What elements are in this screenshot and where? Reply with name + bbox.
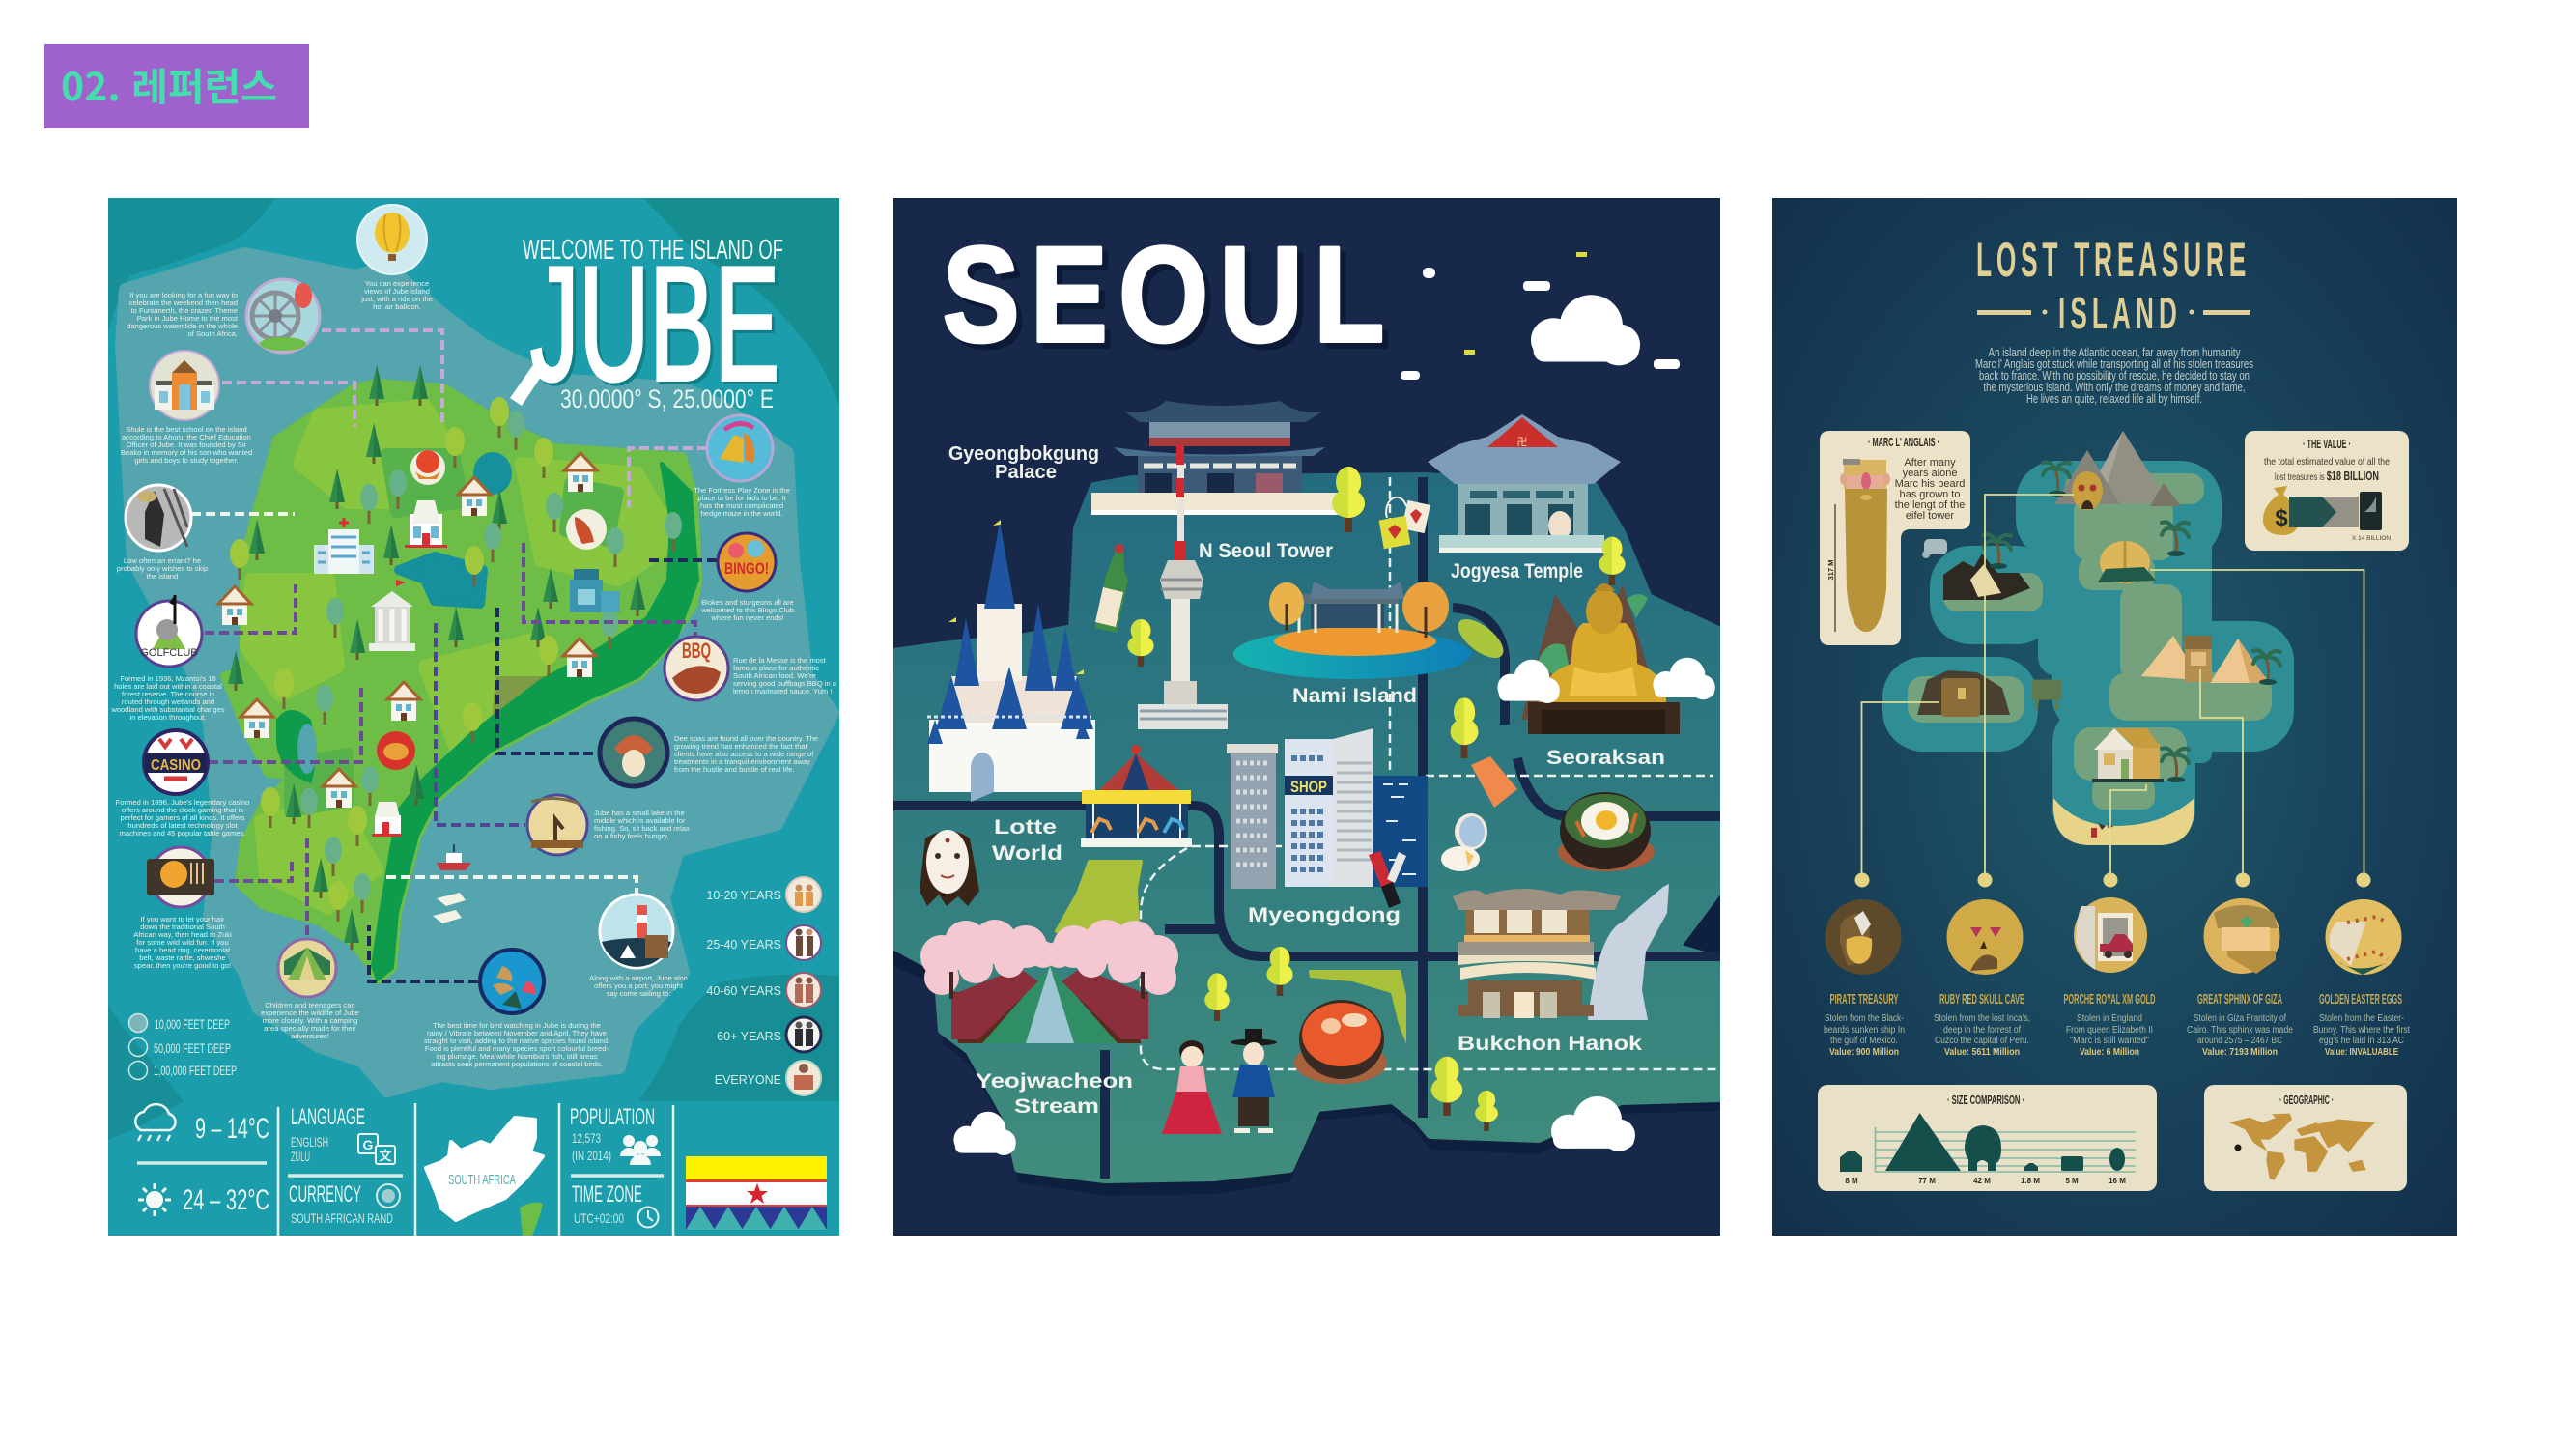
text blurbs: routed through wetlands and xyxy=(122,697,214,706)
food badges xyxy=(377,450,607,770)
currency: CURRENCY xyxy=(289,1181,361,1208)
trees xyxy=(1127,467,1626,1131)
roads xyxy=(893,477,1720,1179)
caption: porche royal: Stolen in England xyxy=(2077,1013,2142,1024)
text blurbs: forest reserve. The course is xyxy=(122,690,214,698)
text blurbs: Formed in 1936, Mzantsi's 18 xyxy=(120,674,216,683)
text blurbs: on a fishy feels hungry. xyxy=(594,832,669,840)
icon: bbq: BBQ xyxy=(682,639,711,663)
card: The Value: · THE VALUE · xyxy=(2303,437,2351,451)
caption: pirate treasury: the gulf of Mexico. xyxy=(1830,1036,1898,1046)
text blurbs: If you want to let your hair xyxy=(141,915,225,923)
sky marks xyxy=(1401,252,1680,380)
place labels: Gyeongbokgung xyxy=(948,443,1099,465)
medallion: pirate treasury xyxy=(1826,899,1901,975)
text blurbs: If you are looking for a fun way to xyxy=(129,291,238,299)
place labels: Myeongdong xyxy=(1248,904,1401,926)
text blurbs: dangerous waterslide in the whole xyxy=(127,322,238,330)
caption: pirate treasury xyxy=(1824,991,1905,1058)
icon: casino xyxy=(144,730,208,794)
intro text: An island deep in the Atlantic ocean, far away from humanity xyxy=(1988,346,2241,359)
text blurbs: offers you a port; you might xyxy=(594,981,684,990)
text blurbs: to Funtanerth, the crazed Theme xyxy=(131,306,238,315)
caption: porche royal: From queen Elizabeth II xyxy=(2066,1025,2153,1036)
text blurbs: belt, waste rattle, shweshe xyxy=(139,953,226,962)
text blurbs: Food is plentiful and many species sport colourful breed- xyxy=(425,1044,609,1053)
currency: SOUTH AFRICAN RAND xyxy=(291,1210,393,1226)
population: POPULATION xyxy=(570,1104,655,1130)
legend: depth: 50,000 FEET DEEP xyxy=(154,1040,231,1056)
scale line xyxy=(1826,504,1835,632)
panel: Lost Treasure Island infographic xyxy=(1772,198,2457,1236)
text blurbs: where fun never ends! xyxy=(710,613,784,622)
text blurbs: have a head ring, ceremonial xyxy=(135,946,230,954)
legend: age groups xyxy=(706,877,821,1095)
card: Marc L'Anglais: years alone xyxy=(1903,468,1957,479)
beach xyxy=(493,676,545,715)
caption: ruby red skull cave xyxy=(1934,991,2030,1058)
icon: airport photo xyxy=(126,485,191,551)
card: size comparison chart: 77 M xyxy=(1918,1177,1936,1185)
legend: depth: 10,000 FEET DEEP xyxy=(155,1016,230,1032)
card: geographic map xyxy=(2204,1085,2407,1191)
text blurbs: for some wild wild fun. If you xyxy=(136,938,229,947)
icon: Gyeongbokgung palace xyxy=(1091,401,1339,515)
place labels: Palace xyxy=(995,462,1057,483)
population xyxy=(570,1104,661,1165)
treasure captions xyxy=(1824,991,2410,1058)
title: JUBE xyxy=(530,233,779,414)
title: SEOUL xyxy=(943,218,1396,370)
card: size comparison chart: 5 M xyxy=(2065,1177,2079,1185)
land xyxy=(893,477,1720,1179)
currency xyxy=(289,1181,400,1226)
heading badge: 02. 레퍼런스: 02. 레퍼런스 xyxy=(61,56,277,112)
text blurbs: African way, then head to Zuki xyxy=(133,930,232,939)
caption: pirate treasury: Stolen from the Black- xyxy=(1825,1013,1904,1024)
text blurbs: welcomed to this Bingo Club xyxy=(700,606,794,614)
beach xyxy=(2053,798,2194,845)
legend: depth xyxy=(129,1014,237,1080)
language: G xyxy=(363,1137,374,1152)
bottom facts bar xyxy=(135,1103,827,1236)
text blurbs: middle which is available for xyxy=(594,816,686,825)
card: Marc L'Anglais: Marc his beard xyxy=(1895,478,1965,490)
card: size comparison chart: 1.8 M xyxy=(2021,1177,2040,1185)
text blurbs: Beako in memory of his son who wanted xyxy=(121,448,252,457)
intro text xyxy=(1975,346,2253,406)
legend: age groups: EVERYONE xyxy=(715,1073,781,1087)
card: size comparison chart: 42 M xyxy=(1973,1177,1991,1185)
card: Marc L'Anglais: After many xyxy=(1904,457,1956,469)
icon: hot air balloon xyxy=(357,205,427,274)
scale line: 317 M xyxy=(1826,560,1835,580)
caption: golden easter eggs: Stolen from the Easter- xyxy=(2319,1013,2404,1024)
icon: money bag xyxy=(2263,486,2298,535)
text blurbs: Jube has a small lake in the xyxy=(594,809,685,817)
icon: Nami Island xyxy=(1233,582,1471,679)
language: 文 xyxy=(379,1149,392,1163)
text blurbs: serving good buffbags BBQ in a xyxy=(733,679,837,688)
icon: golf club xyxy=(136,595,202,667)
island map xyxy=(1882,431,2294,845)
icon: play zone xyxy=(707,415,773,481)
text blurbs: Along with a airport, Jube also xyxy=(589,974,688,982)
text blurbs: girls and boys to study together. xyxy=(134,456,239,465)
icon: Myeongdong buildings xyxy=(1227,728,1428,908)
text blurbs: ing plumage. Meanwhile Namibia's fish, still areas xyxy=(436,1052,598,1061)
caption: great sphinx: GREAT SPHINX OF GIZA xyxy=(2197,991,2282,1008)
text blurbs: adventures! xyxy=(291,1032,329,1040)
text blurbs: in elevation throughout. xyxy=(130,713,206,722)
icon: cosmetics xyxy=(1441,813,1487,871)
time zone: TIME ZONE xyxy=(572,1181,642,1208)
icon: N Seoul Tower xyxy=(1138,445,1228,729)
card: The Value: lost treasures is $18 BILLION xyxy=(2275,469,2379,483)
connector lines xyxy=(1862,495,2364,874)
intro text: the mysterious island. With only the dreams of money and fame, xyxy=(1984,381,2245,394)
language xyxy=(291,1104,395,1164)
card: Marc L'Anglais xyxy=(1820,431,1970,645)
icon: carousel xyxy=(1081,745,1192,847)
time zone: UTC+02:00 xyxy=(574,1210,624,1226)
icon: cloud xyxy=(1531,295,1640,365)
intro text: He lives an quite, relaxed life all by himself. xyxy=(2026,392,2202,406)
caption: ruby red skull cave: RUBY RED SKULL CAVE xyxy=(1939,991,2024,1008)
card: size comparison chart xyxy=(1818,1085,2157,1191)
card: The Value: X 14 BILLION xyxy=(2352,535,2391,542)
card: Marc L'Anglais: has grown to xyxy=(1900,489,1960,500)
caption: golden easter eggs: Value: INVALUABLE xyxy=(2325,1047,2398,1058)
icon: school xyxy=(150,351,219,420)
landmarks xyxy=(1917,431,2269,838)
place labels: Bukchon Hanok xyxy=(1458,1033,1642,1055)
place labels: World xyxy=(992,842,1062,865)
heading badge: 02. 레퍼런스 xyxy=(44,44,309,128)
icon: theme park xyxy=(246,279,320,353)
card: The Value: the total estimated value of all the xyxy=(2264,456,2390,468)
hospital xyxy=(314,518,374,574)
icon: Bukchon hanok and Lotte tower xyxy=(1453,884,1669,1020)
text blurbs: celebrate the weekend then head xyxy=(129,298,238,307)
text blurbs: You can experience xyxy=(365,279,429,288)
text blurbs: growing trend has enhanced the fact that xyxy=(674,742,808,751)
icon: camping tent xyxy=(278,939,336,997)
card: Marc L'Anglais: eifel tower xyxy=(1906,510,1954,522)
icon: bibimbap xyxy=(1558,792,1655,871)
caption: ruby red skull cave: deep in the forrest of xyxy=(1943,1025,2021,1036)
text blurbs: the island xyxy=(147,572,178,581)
caption: golden easter eggs: Bunny. This where the first xyxy=(2313,1025,2410,1036)
legend: age groups: 60+ YEARS xyxy=(717,1030,781,1043)
place labels xyxy=(948,443,1665,1118)
title: WELCOME TO THE ISLAND OF xyxy=(523,235,783,266)
text blurbs: South African food. We're xyxy=(733,671,816,680)
treasure medallions xyxy=(1826,897,2401,975)
treasure captions: PORCHE ROYAL XM GOLD xyxy=(2063,991,2156,1008)
caption: great sphinx: around 2575 – 2467 BC xyxy=(2197,1036,2282,1046)
population: 12,573 xyxy=(572,1130,601,1146)
courthouse xyxy=(369,591,415,651)
text blurbs: attracts seek permanent populations of coastal birds. xyxy=(431,1060,603,1068)
medallion: ruby skull xyxy=(1947,899,2023,975)
text blurbs: of South Africa. xyxy=(187,329,238,338)
weather: sun: 24 – 32°C xyxy=(183,1184,269,1216)
title xyxy=(1976,233,2250,338)
caption: ruby red skull cave: Stolen from the lost Inca's, xyxy=(1934,1013,2030,1024)
legend: depth: 1,00,000 FEET DEEP xyxy=(154,1063,237,1078)
icon: lighthouse xyxy=(600,895,673,968)
panel: Seoul map infographic xyxy=(893,198,1720,1236)
card: size comparison chart: 16 M xyxy=(2109,1177,2126,1185)
caption: porche royal: "Marc is still wanted" xyxy=(2070,1036,2149,1046)
icon: casino: CASINO xyxy=(151,757,201,774)
text blurbs: hedge maze in the world. xyxy=(701,509,782,518)
text blurbs: Shule is the best school on the island xyxy=(126,425,247,434)
medallion: sphinx xyxy=(2204,898,2279,974)
connector lines xyxy=(191,330,721,981)
card: geographic map: · GEOGRAPHIC · xyxy=(2279,1093,2334,1107)
text blurbs: Dee spas are found all over the country. The xyxy=(674,734,818,743)
icon: Jogyesa temple xyxy=(1428,414,1621,553)
text blurbs: Low often an errant? he xyxy=(124,556,201,565)
palm trees xyxy=(1984,462,2280,782)
islet xyxy=(1882,657,2038,752)
text blurbs: rainy / Vibrate between November and April. They have xyxy=(427,1029,607,1037)
title: LOST TREASURE xyxy=(1976,233,2250,287)
connector dots xyxy=(1854,873,2370,887)
text blurbs: views of Jube island xyxy=(364,287,430,296)
icon: bbq xyxy=(665,637,728,700)
text blurbs: Officer of Jube. It was founded by Sir xyxy=(127,440,247,449)
text blurbs: Children and teenagers can xyxy=(265,1001,355,1009)
text blurbs xyxy=(110,279,837,1068)
icon: kimchi stew xyxy=(1294,1000,1387,1084)
text blurbs: hundreds of latest technology slot xyxy=(127,821,238,830)
medallion: royal car xyxy=(2074,897,2147,973)
legend: age groups: 40-60 YEARS xyxy=(706,984,781,998)
shop 2 xyxy=(372,802,402,837)
text blurbs: Rue de la Messe is the most xyxy=(733,656,827,665)
panel: island of Jube infographic xyxy=(108,198,839,1236)
icon: hanbok couple xyxy=(1162,1029,1277,1134)
population: (IN 2014) xyxy=(572,1148,611,1163)
card: size comparison chart: 8 M xyxy=(1845,1177,1858,1185)
title: ISLAND xyxy=(2058,288,2182,338)
caption: pirate treasury: beards sunken ship In xyxy=(1824,1025,1905,1036)
text blurbs: Park in Jube Home to the most xyxy=(137,314,239,323)
text blurbs: area specially made for their xyxy=(264,1024,356,1033)
caption: great sphinx: Cairo. This sphinx was made xyxy=(2187,1025,2293,1036)
card: The Value xyxy=(2245,431,2409,551)
caption: great sphinx: Stolen in Giza Frantcity of xyxy=(2194,1013,2286,1024)
icon: leaf xyxy=(1452,612,1510,665)
icon: arrow xyxy=(2289,497,2359,527)
card: Marc L'Anglais: · MARC L' ANGLAIS · xyxy=(1868,435,1939,449)
text blurbs: Blokes and sturgeons all are xyxy=(701,598,794,607)
text blurbs: just, with a ride on the xyxy=(360,295,433,303)
text blurbs: The best time for bird watching in Jube is during the xyxy=(433,1021,601,1030)
text blurbs: machines and 45 popular table games. xyxy=(120,829,245,838)
weather: sun xyxy=(138,1183,269,1216)
intro text: back to france. With no possibility of rescue, he decided to stay on xyxy=(1979,369,2250,383)
blue building xyxy=(570,569,620,612)
caption: golden easter eggs xyxy=(2313,991,2410,1058)
icon: beard xyxy=(1840,459,1890,632)
green park xyxy=(1057,862,1141,931)
medallion: golden eggs xyxy=(2326,899,2401,975)
flag xyxy=(686,1156,827,1230)
text blurbs: The Fortress Play Zone is the xyxy=(694,486,790,495)
text blurbs: more closely. With a camping xyxy=(263,1016,357,1025)
card: Marc L'Anglais: the lengt of the xyxy=(1895,499,1965,511)
text blurbs: down the traditional South xyxy=(140,923,225,931)
text blurbs: hot air balloon. xyxy=(373,302,421,311)
shop xyxy=(405,500,447,548)
text blurbs: spear, then you're good to go! xyxy=(134,961,231,970)
text blurbs: woodland with substantial changes xyxy=(110,705,225,714)
language: ENGLISH xyxy=(291,1134,328,1150)
caption: pirate treasury: Value: 900 Million xyxy=(1829,1047,1899,1058)
caption: ruby red skull cave: Cuzco the capital of Peru. xyxy=(1935,1036,2029,1046)
intro text: Marc l' Anglais got stuck while transporting all of his stolen treasures xyxy=(1975,357,2253,371)
title: JUBE xyxy=(533,236,782,417)
place labels: Seoraksan xyxy=(1546,747,1665,769)
caption: golden easter eggs: egg's he laid in 313 AC xyxy=(2319,1036,2404,1046)
island map xyxy=(218,365,697,980)
language: LANGUAGE xyxy=(291,1104,365,1130)
text blurbs: place to be for kids to be. It xyxy=(697,494,786,502)
text blurbs: offers around the clock gaming that is xyxy=(122,806,243,814)
text blurbs: say come sailing to. xyxy=(607,989,670,998)
place labels: Lotte xyxy=(994,816,1057,838)
trees xyxy=(228,365,682,950)
icon: money bag: $ xyxy=(2275,505,2288,531)
icon: bingo xyxy=(718,533,776,591)
place labels: Jogyesa Temple xyxy=(1451,560,1583,582)
icon: hahoe mask xyxy=(920,830,979,906)
text blurbs: straight to visit, adding to the native species found island. xyxy=(424,1037,609,1045)
place labels: Nami Island xyxy=(1292,685,1417,707)
lakes and lagoon xyxy=(276,452,512,783)
icon: Seoraksan Buddha xyxy=(1497,583,1715,734)
icon: phone xyxy=(2360,492,2382,530)
icon: Lotte World castle xyxy=(927,520,1095,802)
time zone xyxy=(572,1181,659,1227)
title: SEOUL xyxy=(948,224,1401,376)
legend: age groups: 10-20 YEARS xyxy=(706,889,781,902)
place labels: N Seoul Tower xyxy=(1199,540,1333,562)
text blurbs: probably only wishes to skip xyxy=(117,564,208,573)
text blurbs: lemon marinated sauce. Yum ! xyxy=(733,687,832,696)
dark green coast xyxy=(373,464,697,980)
text blurbs: famous place for authentic xyxy=(733,664,819,672)
card: size comparison chart: · SIZE COMPARISON · xyxy=(1947,1093,2024,1107)
caption: great sphinx xyxy=(2187,991,2293,1058)
text blurbs: experience the wildlife of Jube xyxy=(261,1009,359,1017)
language: ZULU xyxy=(291,1149,310,1164)
text blurbs: clients have also access to a wide range of xyxy=(674,750,814,758)
icon: dinner xyxy=(147,847,214,907)
shop sign: SHOP xyxy=(1290,778,1327,796)
caption: pirate treasury: PIRATE TREASURY xyxy=(1829,991,1899,1008)
caption: porche royal: Value: 6 Million xyxy=(2080,1047,2139,1058)
map: South Africa xyxy=(426,1118,543,1236)
weather: rain xyxy=(135,1104,269,1145)
icon: birds xyxy=(480,950,544,1013)
icon: fishing xyxy=(527,795,587,855)
boats xyxy=(433,844,471,923)
title: 30.0000° S, 25.0000° E xyxy=(560,384,774,413)
caption: great sphinx: Value: 7193 Million xyxy=(2202,1047,2278,1058)
text blurbs: perfect for gamers of all kinds. It offers xyxy=(120,813,245,822)
caption: ruby red skull cave: Value: 5611 Million xyxy=(1944,1047,2020,1058)
text blurbs: has the most complicated xyxy=(700,501,783,510)
legend: age groups: 25-40 YEARS xyxy=(706,938,781,952)
icon: love locks xyxy=(1379,497,1430,549)
weather: rain: 9 – 14°C xyxy=(195,1113,269,1145)
clouds xyxy=(953,1096,1635,1155)
icon: soju bottle xyxy=(1095,544,1128,633)
icon: Jogyesa temple: 卍 xyxy=(1516,436,1528,448)
place labels: Yeojwacheon xyxy=(976,1070,1133,1093)
green strip xyxy=(1309,970,1406,1044)
place labels: Stream xyxy=(1014,1095,1099,1118)
caption: golden easter eggs: GOLDEN EASTER EGGS xyxy=(2319,991,2402,1008)
title xyxy=(510,233,783,417)
map: South Africa: SOUTH AFRICA xyxy=(448,1172,516,1188)
text blurbs: from the hustle and bustle of real life. xyxy=(674,765,795,774)
text blurbs: treatments in a tranquil environment away xyxy=(674,757,810,766)
caption: porche royal xyxy=(2063,991,2156,1058)
beach: BEACH xyxy=(500,688,543,725)
icon: bingo: BINGO! xyxy=(724,559,769,578)
icon: golf club: GOLFCLUB xyxy=(140,647,198,659)
icon: spa woman xyxy=(600,719,667,786)
dashed paths xyxy=(1141,477,1720,1069)
text blurbs: holes are laid out within a coastal xyxy=(114,682,222,691)
text blurbs: according to Ahuru, the Chief Education xyxy=(122,433,251,441)
houses xyxy=(218,453,597,808)
text blurbs: fishing. So, sit back and relax xyxy=(594,824,690,833)
text blurbs: Formed in 1896, Jube's legendary casino xyxy=(116,798,249,807)
icon: Yeojwacheon cherry trees xyxy=(920,920,1178,1043)
icon: kimbap xyxy=(1471,756,1517,808)
